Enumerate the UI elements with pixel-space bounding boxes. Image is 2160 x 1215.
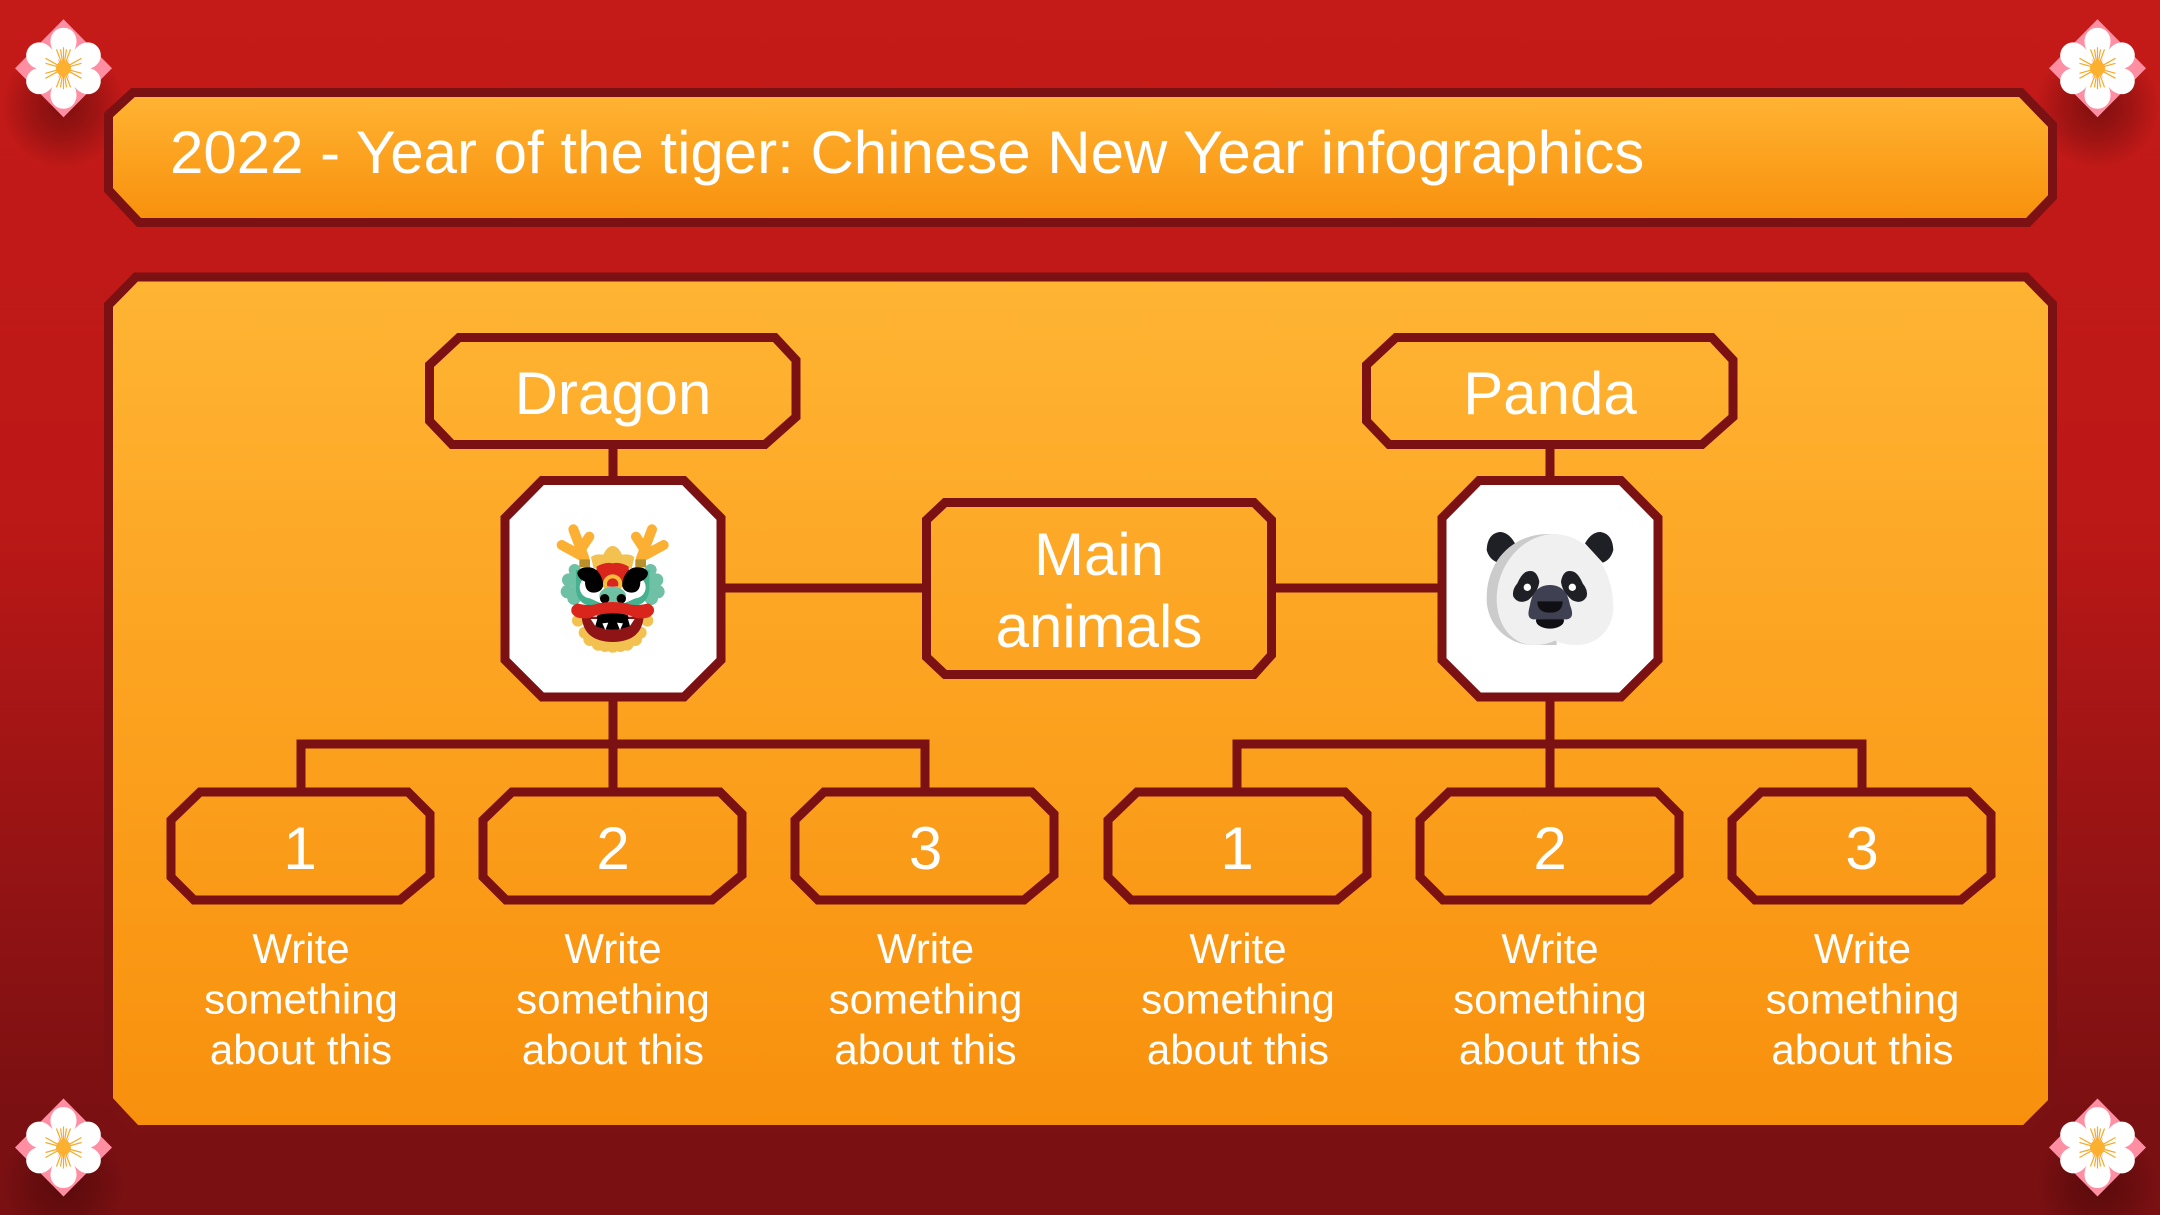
sub-item 2: dragon [483, 792, 742, 1073]
center box: main animals [926, 502, 1272, 674]
main panel [108, 277, 2052, 1130]
label: panda [1366, 338, 1733, 444]
flower: bottom right [2036, 1098, 2160, 1215]
sub-item 3: panda [1732, 792, 1991, 1073]
sub-item 1: panda [1108, 792, 1367, 1073]
sub-item 2: dragon: Write [564, 925, 662, 972]
sub-item 3: panda: Write [1814, 925, 1911, 972]
title: 2022 - Year of the tiger: Chinese New Year infographics [170, 119, 1644, 186]
sub-item 1: dragon: about this [210, 1026, 392, 1073]
label: dragon: Dragon [515, 360, 711, 427]
connectors [301, 445, 1862, 790]
icon box: panda [1442, 480, 1658, 697]
sub-item 1: panda: something [1141, 976, 1335, 1022]
label: dragon [430, 338, 796, 444]
sub-item 1: dragon [171, 792, 430, 1073]
sub-item 2: panda: 2 [1533, 815, 1567, 882]
icon: panda face [1487, 532, 1613, 645]
sub-item 1: dragon: something [204, 976, 398, 1022]
sub-item 3: dragon: Write [877, 925, 974, 972]
center box: main animals: animals [996, 593, 1202, 660]
sub-item 2: dragon: something [516, 976, 710, 1022]
flower: top right [2036, 19, 2160, 168]
sub-item 2: panda: Write [1501, 925, 1599, 972]
sub-item 3: dragon: about this [834, 1026, 1017, 1073]
sub-item 2: panda [1420, 792, 1679, 1073]
sub-item 3: panda: about this [1771, 1026, 1954, 1073]
sub-item 3: dragon: something [829, 976, 1022, 1022]
sub-item 2: panda: about this [1459, 1026, 1641, 1073]
title banner [108, 92, 2052, 222]
sub-item 2: dragon: about this [522, 1026, 704, 1073]
sub-item 3: dragon [795, 792, 1054, 1073]
sub-item 3: dragon: 3 [909, 815, 942, 882]
label: panda: Panda [1463, 360, 1637, 427]
flower: bottom left [2, 1098, 126, 1215]
sub-item 3: panda: something [1766, 976, 1959, 1022]
sub-item 1: panda: Write [1189, 925, 1287, 972]
flower: top left [2, 19, 126, 168]
icon box: dragon [505, 480, 721, 697]
sub-item 2: panda: something [1453, 976, 1647, 1022]
sub-item 2: dragon: 2 [596, 815, 630, 882]
sub-item 1: dragon: Write [252, 925, 350, 972]
sub-item 3: panda: 3 [1845, 815, 1879, 882]
sub-item 1: dragon: 1 [283, 815, 317, 882]
icon: dragon face [561, 529, 665, 653]
sub-item 1: panda: 1 [1220, 815, 1254, 882]
sub-item 1: panda: about this [1147, 1026, 1329, 1073]
center box: main animals: Main [1034, 521, 1164, 588]
